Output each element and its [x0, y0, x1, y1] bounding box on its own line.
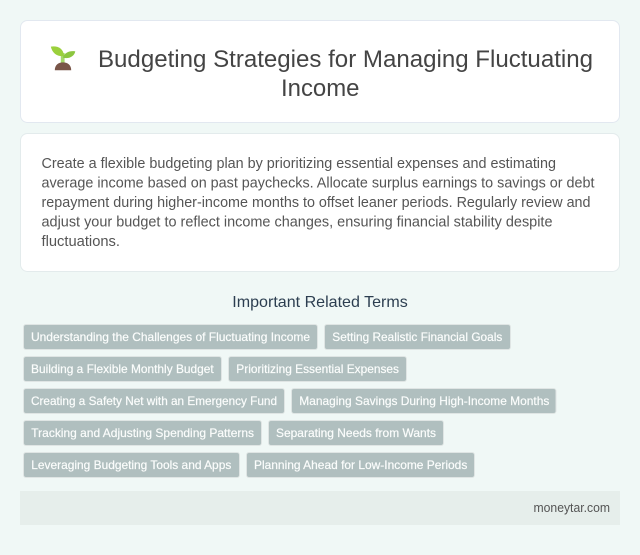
icon: sprout: [51, 46, 75, 70]
tag: [324, 324, 510, 350]
title: [98, 46, 593, 102]
tag: [24, 452, 240, 478]
description text: adjust your budget to reflect income changes, ensuring financial stability despite: [42, 214, 552, 230]
title: Budgeting Strategies for Managing Fluctuating: [98, 46, 593, 73]
tag: [24, 324, 318, 350]
title: Income: [281, 75, 360, 102]
tag: [246, 452, 474, 478]
footer: [20, 491, 620, 525]
description text: [42, 156, 594, 250]
tag: Managing Savings During High-Income Months: [299, 394, 549, 408]
tag: [268, 420, 444, 446]
panel: description: [20, 134, 620, 272]
tag: Leveraging Budgeting Tools and Apps: [31, 458, 231, 472]
tag: Separating Needs from Wants: [276, 426, 436, 440]
tag: [24, 420, 262, 446]
heading: important related terms: Important Related Terms: [232, 294, 408, 311]
tag: [24, 356, 222, 382]
description text: Create a flexible budgeting plan by prioritizing essential expenses and estimating: [42, 156, 556, 172]
tag: [292, 388, 556, 414]
footer source: moneytar.com: [534, 501, 610, 515]
tag: [228, 356, 406, 382]
tag: Prioritizing Essential Expenses: [236, 362, 399, 376]
tag: [24, 388, 284, 414]
tag: Creating a Safety Net with an Emergency Fund: [31, 394, 277, 408]
description text: fluctuations.: [42, 234, 120, 250]
panel: header: [20, 20, 620, 122]
description text: repayment during higher-income months to offset leaner periods. Regularly review and: [42, 195, 590, 211]
tag: Understanding the Challenges of Fluctuating Income: [31, 330, 310, 344]
description text: average income based on past paychecks. Allocate surplus earnings to savings or debt: [42, 176, 594, 192]
tag: Setting Realistic Financial Goals: [332, 330, 502, 344]
tag list: [24, 324, 556, 478]
tag: Building a Flexible Monthly Budget: [31, 362, 214, 376]
tag: Planning Ahead for Low-Income Periods: [254, 458, 467, 472]
tag: Tracking and Adjusting Spending Patterns: [31, 426, 254, 440]
